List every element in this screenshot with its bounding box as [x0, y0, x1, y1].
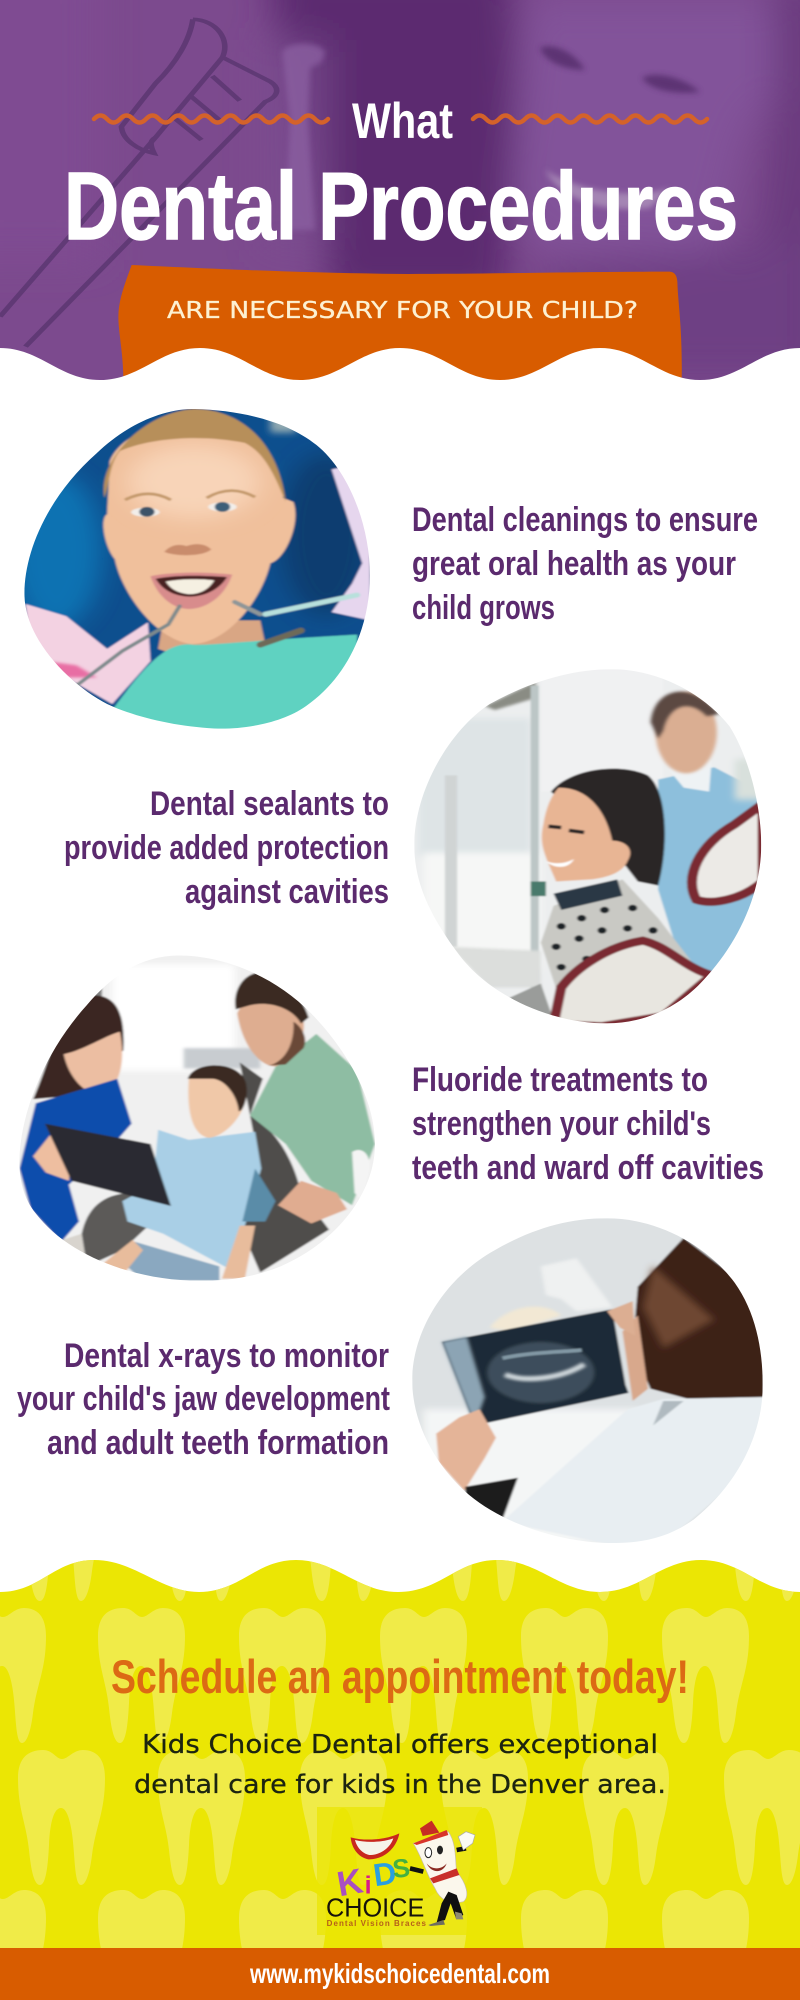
text 2: Dental sealants to	[150, 785, 389, 823]
x-ray film	[442, 1309, 629, 1426]
text 3: Fluoride treatments to	[412, 1061, 708, 1099]
teal bib	[112, 635, 357, 733]
dentist	[658, 767, 761, 979]
smile	[151, 573, 232, 609]
nose	[164, 544, 211, 555]
dental tool silhouette in photo	[282, 44, 325, 230]
woman's face	[64, 1032, 122, 1095]
right glove	[332, 465, 370, 620]
man's shirt	[250, 1034, 375, 1205]
doctor's hair	[633, 1238, 764, 1399]
child's eyes in photo	[540, 46, 700, 93]
wavy line left	[94, 116, 328, 122]
photo 4: dentist examining x-ray	[408, 1213, 770, 1548]
white scalloped edge	[0, 348, 800, 440]
header panel	[0, 0, 800, 380]
wavy line right	[473, 116, 707, 122]
text 4: and adult teeth formation	[47, 1424, 389, 1462]
photo 2: girl in dental chair with dentist	[408, 665, 765, 1028]
text 1: child grows	[412, 589, 555, 627]
letters: Kids: D	[371, 1854, 399, 1893]
tablet	[45, 1124, 171, 1206]
text 2: provide added protection	[64, 829, 389, 867]
neck	[156, 618, 266, 652]
text 3: strengthen your child's	[412, 1105, 711, 1143]
boy's head	[188, 1076, 245, 1138]
letters: Kids: i	[365, 1871, 372, 1899]
body text: Kids Choice Dental offers exceptional	[142, 1730, 658, 1760]
text 4	[17, 1337, 390, 1462]
logo: Kids Choice	[317, 1807, 482, 1935]
letters: Kids: K	[334, 1862, 366, 1904]
yellow background with scalloped top	[0, 1466, 800, 2000]
dark object	[465, 1478, 518, 1519]
word: CHOICE: CHOICE	[326, 1893, 424, 1923]
doctor's face/neck	[622, 1315, 648, 1401]
bib	[122, 1130, 261, 1270]
man's hand	[278, 1181, 347, 1224]
lab coat	[503, 1397, 764, 1544]
word: What: What	[352, 93, 453, 149]
woman's arm	[33, 1128, 71, 1181]
eyes	[131, 508, 160, 517]
plaid shorts	[122, 1242, 219, 1281]
toothbrush outline	[0, 19, 277, 347]
lower hand	[436, 1409, 496, 1491]
hair	[104, 409, 286, 502]
polka-dot dress	[540, 879, 692, 988]
orange subtitle banner	[118, 265, 682, 383]
subtitle text: ARE NECESSARY FOR YOUR CHILD?	[167, 298, 638, 324]
girl hair	[551, 769, 665, 886]
front chair	[554, 941, 712, 1026]
tooth pattern	[0, 1466, 800, 2000]
left glove	[26, 604, 151, 704]
website bar	[0, 1948, 800, 2000]
text 4: your child's jaw development	[17, 1380, 390, 1418]
tooth mascot	[410, 1821, 475, 1926]
body text	[134, 1730, 666, 1800]
text 4: Dental x-rays to monitor	[64, 1337, 389, 1375]
text 3	[412, 1061, 764, 1187]
dental instruments	[77, 595, 357, 686]
tagline: Dental Vision Braces	[327, 1919, 427, 1928]
text 2: against cavities	[185, 873, 389, 911]
text 1: great oral health as your	[412, 545, 736, 583]
chair	[240, 1062, 329, 1273]
letters: Kids: S	[391, 1852, 411, 1884]
text 2	[64, 785, 389, 911]
smile icon	[351, 1833, 399, 1859]
upper hand	[607, 1301, 635, 1336]
text 1	[412, 501, 758, 627]
woman's hair	[33, 995, 124, 1099]
website url: www.mykidschoicedental.com	[249, 1958, 550, 1989]
gray floor	[63, 1234, 86, 1254]
letters: Kids	[334, 1852, 411, 1904]
woman's shirt	[19, 1079, 132, 1242]
face	[103, 418, 295, 644]
footer panel	[0, 1466, 800, 2000]
girl face	[542, 788, 630, 881]
right chair	[692, 804, 763, 902]
photo 3: family looking at tablet	[20, 956, 375, 1280]
header photo background in purple duotone	[0, 0, 800, 400]
child's smile in photo	[545, 170, 670, 209]
legs	[99, 1226, 255, 1279]
photo 1: smiling boy at dentist	[24, 409, 370, 729]
body text: dental care for kids in the Denver area.	[134, 1770, 666, 1800]
man's head	[237, 996, 304, 1066]
